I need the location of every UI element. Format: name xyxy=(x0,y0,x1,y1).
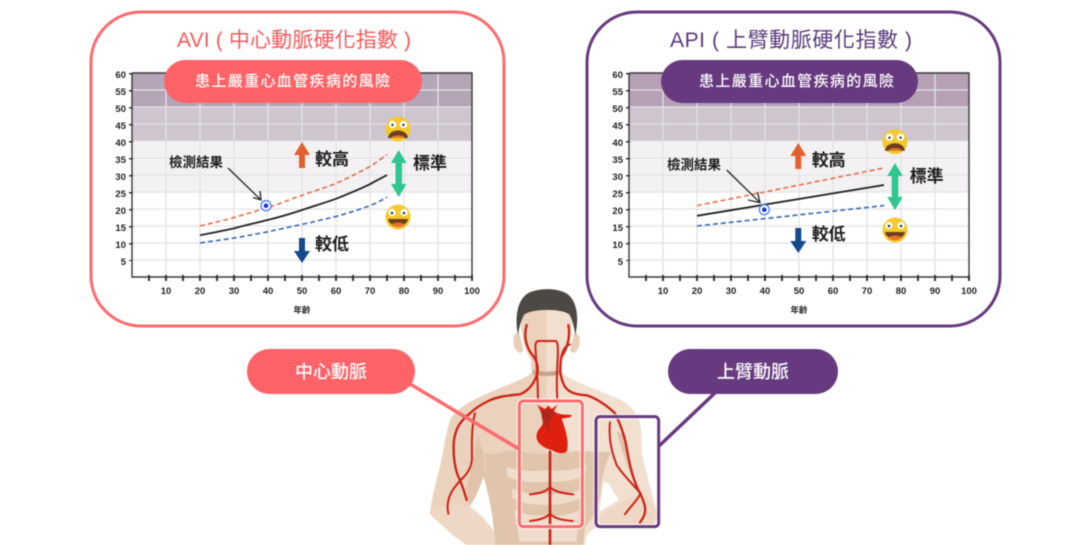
API chart: 45 xyxy=(612,121,624,132)
panel frame xyxy=(587,12,1000,326)
API chart: 年齡 xyxy=(790,305,808,315)
lighter right half xyxy=(547,372,658,545)
white gap at right arm xyxy=(599,482,619,512)
AVI chart: 40 xyxy=(263,286,273,297)
icon: worried face xyxy=(882,129,908,154)
AVI standard label: 標準 xyxy=(413,153,447,173)
API chart: 25 xyxy=(612,189,624,200)
AVI chart: 25 xyxy=(115,189,127,200)
AVI chart: 50 xyxy=(115,104,126,115)
torso shadows xyxy=(483,451,612,545)
abdomen highlights xyxy=(506,465,587,542)
heart xyxy=(536,405,572,453)
AVI chart: 45 xyxy=(115,121,127,132)
AVI chart: 10 xyxy=(115,240,126,251)
AVI chart: 10 xyxy=(161,286,171,297)
API chart: 10 xyxy=(658,286,668,297)
human figure with arteries xyxy=(430,289,659,545)
AVI chart: 90 xyxy=(433,286,443,297)
icon: happy face xyxy=(882,218,908,242)
AVI lower label: 較低 xyxy=(315,234,349,254)
AVI chart: 20 xyxy=(195,286,205,297)
AVI chart: 35 xyxy=(115,155,127,166)
API title: API ( 上臂動脈硬化指數 ) xyxy=(670,29,912,52)
AVI up arrow xyxy=(294,142,310,168)
connector: upper arm artery xyxy=(659,392,716,446)
AVI chart: 30 xyxy=(115,172,126,183)
AVI title: AVI ( 中心動脈硬化指數 ) xyxy=(177,29,411,52)
API chart: 10 xyxy=(612,240,623,251)
AVI chart: 5 xyxy=(121,257,127,268)
pink highlight box: central artery xyxy=(519,401,582,527)
AVI result arrow xyxy=(228,168,261,200)
label: central artery xyxy=(247,349,415,394)
API chart: 20 xyxy=(612,206,623,217)
API up arrow xyxy=(790,143,806,169)
API chart: 50 xyxy=(612,104,623,115)
AVI risk pill: 患上嚴重心血管疾病的風險 xyxy=(195,72,390,90)
API chart: 50 xyxy=(794,286,804,297)
AVI chart: 80 xyxy=(399,286,409,297)
body silhouette xyxy=(430,372,658,545)
API chart: 30 xyxy=(726,286,736,297)
AVI chart: 20 xyxy=(115,206,126,217)
AVI down arrow xyxy=(294,238,310,263)
API risk pill xyxy=(661,60,918,103)
ears xyxy=(513,333,580,353)
AVI chart: 55 xyxy=(115,87,127,98)
forearms xyxy=(432,493,658,545)
API chart: 100 xyxy=(961,286,977,297)
AVI chart: 15 xyxy=(115,223,127,234)
API chart: 40 xyxy=(760,286,770,297)
API chart: 55 xyxy=(612,87,624,98)
API chart: 15 xyxy=(612,223,624,234)
AVI higher label: 較高 xyxy=(315,149,349,169)
label: upper arm artery xyxy=(668,349,838,394)
API chart: 60 xyxy=(828,286,838,297)
head xyxy=(521,293,572,370)
API chart: 80 xyxy=(896,286,906,297)
API risk pill: 患上嚴重心血管疾病的風險 xyxy=(699,72,894,90)
API chart: 60 xyxy=(612,70,623,81)
AVI chart: 40 xyxy=(115,138,126,149)
hair xyxy=(517,289,577,335)
API chart xyxy=(612,70,977,315)
API result label: 檢測結果 xyxy=(667,156,722,172)
arm shadows xyxy=(467,432,638,505)
connector: central artery xyxy=(405,381,519,449)
API chart: 90 xyxy=(930,286,940,297)
AVI standard double arrow xyxy=(391,150,406,197)
panel frame xyxy=(91,12,504,326)
API standard label: 標準 xyxy=(910,166,944,186)
API chart: 5 xyxy=(618,257,624,268)
AVI result label: 檢測結果 xyxy=(169,154,224,170)
AVI chart: 100 xyxy=(464,286,480,297)
API chart: 35 xyxy=(612,155,624,166)
arteries xyxy=(448,325,645,545)
AVI chart: 60 xyxy=(115,70,126,81)
icon: happy face xyxy=(386,204,410,230)
label: upper arm artery: 上臂動脈 xyxy=(717,362,789,382)
API down arrow xyxy=(790,228,806,253)
API chart: 70 xyxy=(862,286,872,297)
AVI chart: 50 xyxy=(297,286,307,297)
API chart: 40 xyxy=(612,138,623,149)
panel: API xyxy=(587,12,1000,326)
panel: AVI xyxy=(91,12,504,326)
AVI measured point xyxy=(261,201,271,211)
label: central artery: 中心動脈 xyxy=(295,362,367,382)
AVI chart: 70 xyxy=(365,286,375,297)
API lower label: 較低 xyxy=(812,224,846,244)
AVI chart xyxy=(115,70,480,315)
AVI chart: 年齡 xyxy=(293,305,311,315)
API measured point xyxy=(759,205,769,215)
API higher label: 較高 xyxy=(812,150,846,170)
icon: worried face xyxy=(386,116,410,142)
API chart: 30 xyxy=(612,172,623,183)
API standard double arrow xyxy=(887,163,903,210)
AVI chart: 30 xyxy=(229,286,239,297)
AVI risk pill xyxy=(164,60,422,103)
API result arrow xyxy=(727,170,760,203)
neck xyxy=(527,357,567,393)
API chart: 20 xyxy=(692,286,702,297)
AVI chart: 60 xyxy=(331,286,341,297)
purple highlight box: upper arm artery xyxy=(596,417,659,527)
